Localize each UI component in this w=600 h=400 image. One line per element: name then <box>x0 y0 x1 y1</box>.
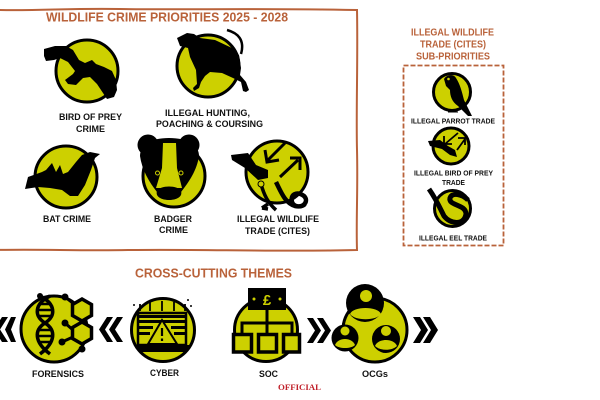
icon: illegal wildlife trade <box>231 141 308 210</box>
label: cyber: CYBER <box>150 368 179 378</box>
label: illegal eel trade: ILLEGAL EEL TRADE <box>419 234 487 242</box>
label: badger crime: CRIME <box>159 225 188 235</box>
label: illegal wildlife trade cites: ILLEGAL WILDLIFE <box>237 214 319 224</box>
icon: parrot <box>434 74 472 116</box>
label: illegal hunting: POACHING & COURSING <box>156 119 263 129</box>
arrow: right chevrons <box>307 318 331 343</box>
heading: cites sub-priorities: ILLEGAL WILDLIFE <box>411 28 494 38</box>
panel: cites sub-priorities dashed box <box>404 66 504 246</box>
icon: bat <box>25 146 100 208</box>
heading: wildlife crime priorities: WILDLIFE CRIME PRIORITIES 2025 - 2028 <box>46 10 288 24</box>
label: badger crime: BADGER <box>154 214 192 224</box>
icon: eel <box>429 189 470 226</box>
label: ocgs: OCGs <box>362 369 388 379</box>
icon: forensics <box>21 293 92 362</box>
label: illegal wildlife trade cites: TRADE (CITES) <box>245 226 310 236</box>
label: illegal wildlife trade cites <box>237 214 319 236</box>
label: illegal bird of prey trade <box>414 168 493 187</box>
heading: cross-cutting themes: CROSS-CUTTING THEMES <box>135 266 292 280</box>
arrow: left chevrons <box>99 317 123 342</box>
label: bat crime: BAT CRIME <box>43 214 91 224</box>
icon: soc money hierarchy <box>234 288 300 362</box>
label: badger crime <box>154 214 192 235</box>
label: bird of prey crime <box>59 112 122 134</box>
label: illegal hunting: ILLEGAL HUNTING, <box>165 108 250 118</box>
heading: cites sub-priorities <box>411 28 494 62</box>
icon: bird of prey <box>44 40 118 102</box>
label: bird of prey crime: CRIME <box>76 124 105 134</box>
icon: hunting dog <box>177 30 249 97</box>
icon: bird of prey trade <box>428 128 469 164</box>
heading: cites sub-priorities: SUB-PRIORITIES <box>416 52 490 62</box>
icon: cyber laptop <box>132 298 194 362</box>
label: illegal bird of prey trade: TRADE <box>442 178 465 187</box>
label: forensics: FORENSICS <box>32 369 84 379</box>
label: illegal parrot trade: ILLEGAL PARROT TRADE <box>411 116 495 126</box>
label: official marking: OFFICIAL <box>278 382 321 392</box>
icon: soc money hierarchy: £ <box>263 292 272 309</box>
label: illegal hunting <box>156 108 263 129</box>
panel: wildlife crime priorities frame <box>0 9 357 251</box>
arrow: far left chevrons <box>0 317 16 342</box>
label: illegal bird of prey trade: ILLEGAL BIRD OF PREY <box>414 168 493 178</box>
icon: badger <box>138 134 205 207</box>
arrow: far right chevrons <box>413 317 438 343</box>
label: bird of prey crime: BIRD OF PREY <box>59 112 122 122</box>
label: soc: SOC <box>259 369 278 379</box>
heading: cites sub-priorities: TRADE (CITES) <box>420 40 486 50</box>
icon: ocgs people network <box>332 284 407 362</box>
